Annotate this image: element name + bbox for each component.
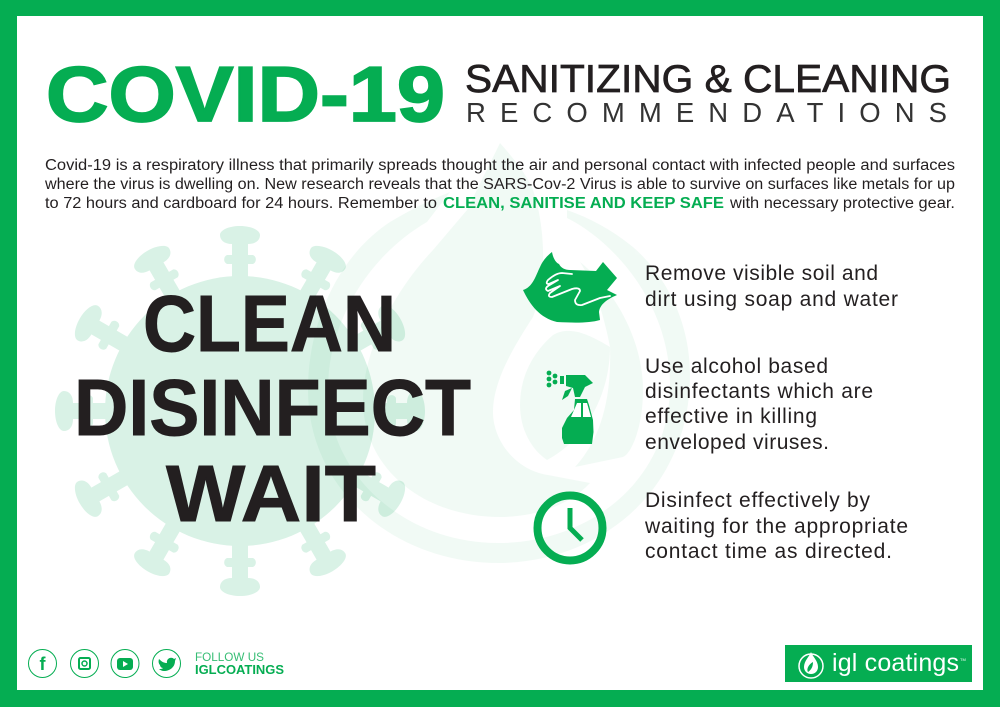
- icon: spray bottle: [547, 371, 594, 444]
- icon: instagram: [70, 650, 98, 678]
- icon: youtube: [111, 650, 139, 678]
- text: contact time: [644, 489, 908, 563]
- text: alcohol disinfectants: [645, 355, 873, 454]
- text: contact time: waiting for the appropriate: [644, 515, 908, 538]
- virus illustration: [55, 226, 425, 596]
- intro paragraph: [44, 157, 955, 212]
- text: remove soil: dirt using soap and water: [645, 288, 898, 311]
- intro paragraph: Covid-19 is a respiratory illness that primarily spreads thought the air and personal contact with infected people and surfaces: [45, 157, 955, 174]
- follow us label: FOLLOW US: [195, 650, 264, 664]
- icon: facebook: [28, 650, 56, 678]
- intro paragraph: CLEAN, SANITISE AND KEEP SAFE: [443, 195, 724, 212]
- main message: clean disinfect wait: WAIT: [166, 449, 376, 538]
- logo: igl coatings: [785, 645, 972, 682]
- text: contact time: contact time as directed.: [645, 540, 892, 563]
- text: alcohol disinfectants: Use alcohol based: [645, 355, 828, 378]
- title: COVID-19: COVID-19: [46, 50, 445, 138]
- intro paragraph: where the virus is dwelling on. New research reveals that the SARS-Cov-2 Virus is able to survive on surfaces like metals for up: [44, 176, 955, 193]
- watermark: droplet logo: [308, 143, 690, 563]
- intro paragraph: to 72 hours and cardboard for 24 hours. Remember to: [45, 195, 437, 212]
- text: alcohol disinfectants: enveloped viruses.: [645, 431, 829, 454]
- follow us label: [195, 650, 284, 677]
- subtitle: sanitizing and cleaning: SANITIZING & CLEANING: [465, 58, 951, 101]
- text: contact time: Disinfect effectively by: [645, 489, 870, 512]
- logo: igl coatings: TM: [960, 657, 966, 662]
- intro paragraph: with necessary protective gear.: [729, 195, 955, 212]
- main message: clean disinfect wait: [74, 279, 471, 538]
- text: remove soil: Remove visible soil and: [645, 262, 878, 285]
- text: remove soil: [645, 262, 898, 311]
- main message: clean disinfect wait: DISINFECT: [74, 363, 471, 452]
- icon: clock: [538, 496, 602, 560]
- main message: clean disinfect wait: CLEAN: [143, 279, 396, 368]
- text: alcohol disinfectants: effective in killing: [645, 405, 817, 428]
- icon: facebook: f: [40, 654, 46, 674]
- icon: hand wiping with cloth: [523, 252, 617, 323]
- text: alcohol disinfectants: disinfectants which are: [645, 380, 873, 403]
- follow us label: IGLCOATINGS: [195, 662, 284, 677]
- logo: igl coatings: igl coatings: [832, 649, 959, 677]
- subtitle: recommendations: RECOMMENDATIONS: [466, 97, 947, 128]
- icon: twitter: [152, 650, 180, 678]
